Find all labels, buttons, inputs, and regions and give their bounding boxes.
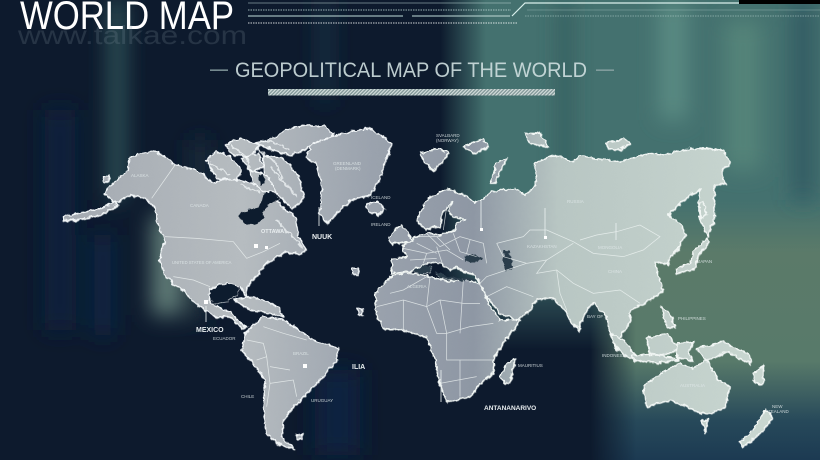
country and city labels: UNITED STATES OF AMERICA bbox=[172, 260, 232, 265]
country and city labels: IRELAND bbox=[371, 222, 391, 227]
country and city labels: URUGUAY bbox=[311, 398, 333, 403]
country borders: Eurasia and Africa bbox=[377, 207, 660, 397]
Hudson Bay and arctic channels bbox=[209, 173, 280, 303]
country and city labels: PHILIPPINES bbox=[678, 316, 706, 321]
country and city labels: ILIA bbox=[352, 364, 365, 371]
country and city labels bbox=[131, 133, 790, 414]
subtitle heading: GEOPOLITICAL MAP OF THE WORLD bbox=[235, 59, 587, 82]
subtitle left dash bbox=[210, 70, 228, 71]
country and city labels: (NORWAY) bbox=[436, 138, 459, 143]
country and city labels: CHINA bbox=[608, 269, 622, 274]
landmass: Americas and Greenland bbox=[63, 125, 392, 448]
country and city labels: ALGERIA bbox=[407, 284, 427, 289]
country and city labels: ALASKA bbox=[131, 173, 149, 178]
country and city labels: BAY OF bbox=[587, 314, 603, 319]
subtitle right dash bbox=[596, 70, 614, 71]
capital markers and leader lines bbox=[204, 200, 616, 402]
landmass: Eurasia, Africa and Oceania bbox=[375, 133, 773, 447]
country and city labels: RUSSIA bbox=[567, 199, 584, 204]
arctic coast highlights bbox=[210, 140, 303, 248]
top right black corner bbox=[739, 0, 820, 4]
country and city labels: SVALBARD bbox=[436, 133, 460, 138]
country and city labels: MEXICO bbox=[196, 327, 224, 334]
hatched underline bar bbox=[268, 89, 555, 96]
country and city labels: (DENMARK) bbox=[335, 166, 361, 171]
country and city labels: ECUADOR bbox=[213, 336, 236, 341]
country and city labels: NEW bbox=[772, 404, 783, 409]
watermark: www.talkae.com bbox=[17, 20, 247, 50]
country and city labels: GREENLAND bbox=[333, 161, 362, 166]
country and city labels: ICELAND bbox=[371, 195, 391, 200]
country borders: Americas bbox=[152, 165, 307, 407]
country and city labels: MAURITIUS bbox=[518, 363, 543, 368]
country and city labels: ZEALAND bbox=[768, 409, 790, 414]
world map bbox=[63, 125, 790, 448]
country and city labels: INDONESIA bbox=[602, 353, 627, 358]
inland seas bbox=[413, 251, 513, 282]
country and city labels: OTTAWA bbox=[261, 229, 284, 235]
country and city labels: JAPAN bbox=[698, 259, 712, 264]
country and city labels: BRAZIL bbox=[293, 351, 309, 356]
header circuit lines bbox=[248, 3, 820, 23]
country and city labels: KAZAKHSTAN bbox=[527, 244, 557, 249]
country and city labels: NUUK bbox=[312, 234, 332, 241]
country and city labels: CANADA bbox=[190, 203, 209, 208]
country and city labels: AUSTRALIA bbox=[680, 383, 705, 388]
country and city labels: CHILE bbox=[241, 394, 254, 399]
country and city labels: ANTANANARIVO bbox=[484, 405, 536, 412]
country and city labels: MONGOLIA bbox=[598, 245, 622, 250]
